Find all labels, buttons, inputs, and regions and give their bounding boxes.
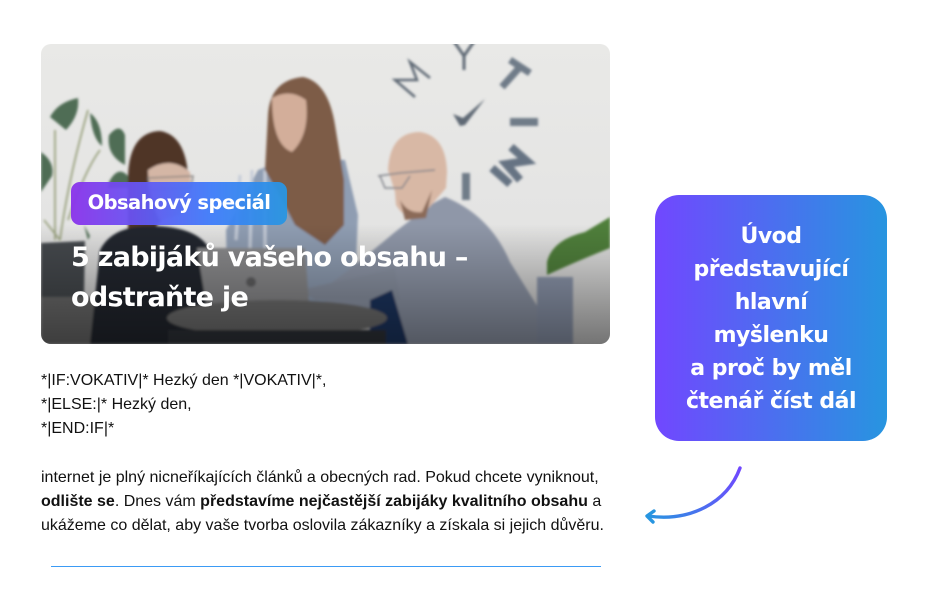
hero banner — [41, 44, 610, 344]
badge: Obsahový speciál — [71, 182, 287, 225]
laptop — [197, 248, 310, 316]
divider line — [51, 566, 601, 567]
callout box — [655, 195, 887, 441]
wall letters — [395, 40, 538, 200]
intro paragraph: internet je plný nicneříkajících článků a obecných rad. Pokud chcete vyniknout, — [41, 469, 599, 486]
intro paragraph: ukážeme co dělat, aby vaše tvorba oslovila zákazníky a získala si jejich důvěru. — [41, 517, 604, 534]
woman middle — [226, 158, 358, 320]
intro paragraph: odlište se. Dnes vám představíme nejčastější zabijáky kvalitního obsahu a — [41, 493, 601, 510]
plant left — [41, 98, 128, 240]
greeting merge tags — [41, 372, 326, 437]
banner headline: odstraňte je — [71, 282, 248, 313]
callout box: čtenář číst dál — [686, 389, 856, 414]
table — [167, 300, 387, 336]
callout box: Úvod — [740, 224, 802, 249]
callout box: představující — [694, 257, 848, 282]
greeting merge tags: *|END:IF|* — [41, 420, 114, 437]
woman left — [128, 131, 188, 232]
banner headline: 5 zabijáků vašeho obsahu – — [71, 242, 468, 273]
callout box: a proč by měl — [690, 356, 852, 381]
plant right — [547, 217, 610, 275]
callout box: myšlenku — [714, 323, 828, 348]
banner headline — [71, 242, 468, 313]
check mark — [453, 99, 485, 126]
callout box: hlavní — [735, 290, 807, 315]
man — [315, 197, 552, 344]
intro paragraph — [41, 469, 604, 534]
greeting merge tags: *|IF:VOKATIV|* Hezký den *|VOKATIV|*, — [41, 372, 326, 389]
badge: Obsahový speciál: Obsahový speciál — [88, 191, 270, 214]
greeting merge tags: *|ELSE:|* Hezký den, — [41, 396, 192, 413]
chair — [537, 277, 573, 344]
banner photo — [41, 44, 610, 344]
